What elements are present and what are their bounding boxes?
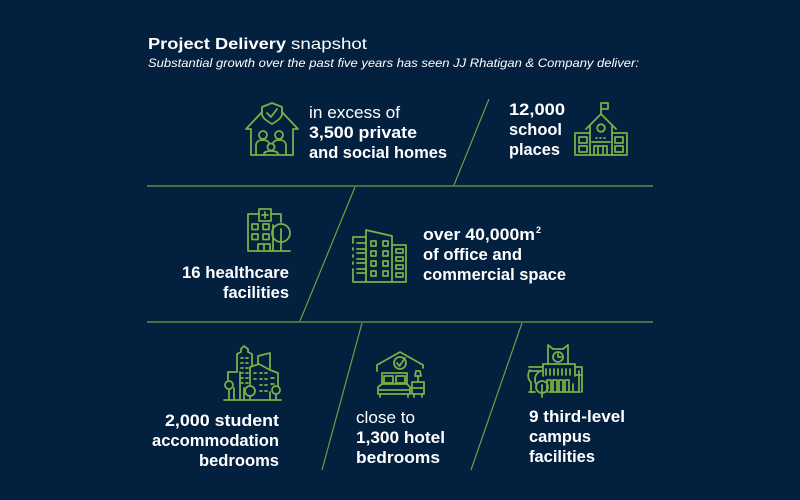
- text: office: commercial space: [423, 266, 566, 284]
- text: campus: 9 third-level: [529, 408, 625, 426]
- text: office: [423, 225, 566, 284]
- panel: homes: [246, 103, 447, 162]
- text: student: [152, 412, 280, 470]
- icon: office buildings: [353, 230, 406, 282]
- text: healthcare: 16 healthcare: [182, 264, 289, 282]
- icon: hotel bed under roof: [377, 352, 424, 397]
- text: student: 2,000 student: [165, 412, 280, 430]
- subtitle: Substantial growth over the past five years has seen JJ Rhatigan & Company deliver:: [148, 58, 639, 70]
- icon: campus building with clock tower: [528, 345, 582, 397]
- text: campus: facilities: [529, 448, 595, 466]
- text: office: of office and: [423, 246, 522, 264]
- icon: hospital with tree: [248, 209, 290, 251]
- text: healthcare: [182, 264, 289, 302]
- panel: school: [509, 101, 627, 159]
- text: hotel: 1,300 hotel: [356, 429, 445, 447]
- panel: office: [353, 225, 566, 284]
- title: [148, 36, 368, 53]
- panel: campus: [528, 345, 625, 466]
- text: healthcare: facilities: [223, 284, 289, 302]
- panel: healthcare: [182, 209, 290, 302]
- text: homes: 3,500 private: [309, 124, 417, 142]
- icon: school building: [575, 103, 627, 155]
- text: school: 12,000: [509, 101, 565, 119]
- text: campus: [529, 408, 625, 466]
- text: school: school: [509, 121, 562, 139]
- text: student: accommodation: [152, 432, 279, 450]
- icon: city buildings with trees: [224, 346, 281, 400]
- panel: student accommodation: [152, 346, 281, 470]
- text: homes: in excess of: [309, 104, 400, 122]
- text: office: 2: [536, 225, 541, 235]
- text: hotel: [356, 409, 445, 467]
- text: hotel: bedrooms: [356, 449, 440, 467]
- text: office: over 40,000m: [423, 226, 535, 244]
- title: Project Delivery: [148, 36, 286, 53]
- text: school: [509, 101, 565, 159]
- icon: house with family and shield: [246, 103, 298, 155]
- text: campus: campus: [529, 428, 591, 446]
- text: hotel: close to: [356, 409, 415, 427]
- text: school: places: [509, 141, 560, 159]
- text: student: bedrooms: [199, 452, 279, 470]
- title: snapshot: [291, 36, 368, 53]
- panel: hotel: [356, 352, 445, 467]
- text: homes: [309, 104, 447, 162]
- text: homes: and social homes: [309, 144, 447, 162]
